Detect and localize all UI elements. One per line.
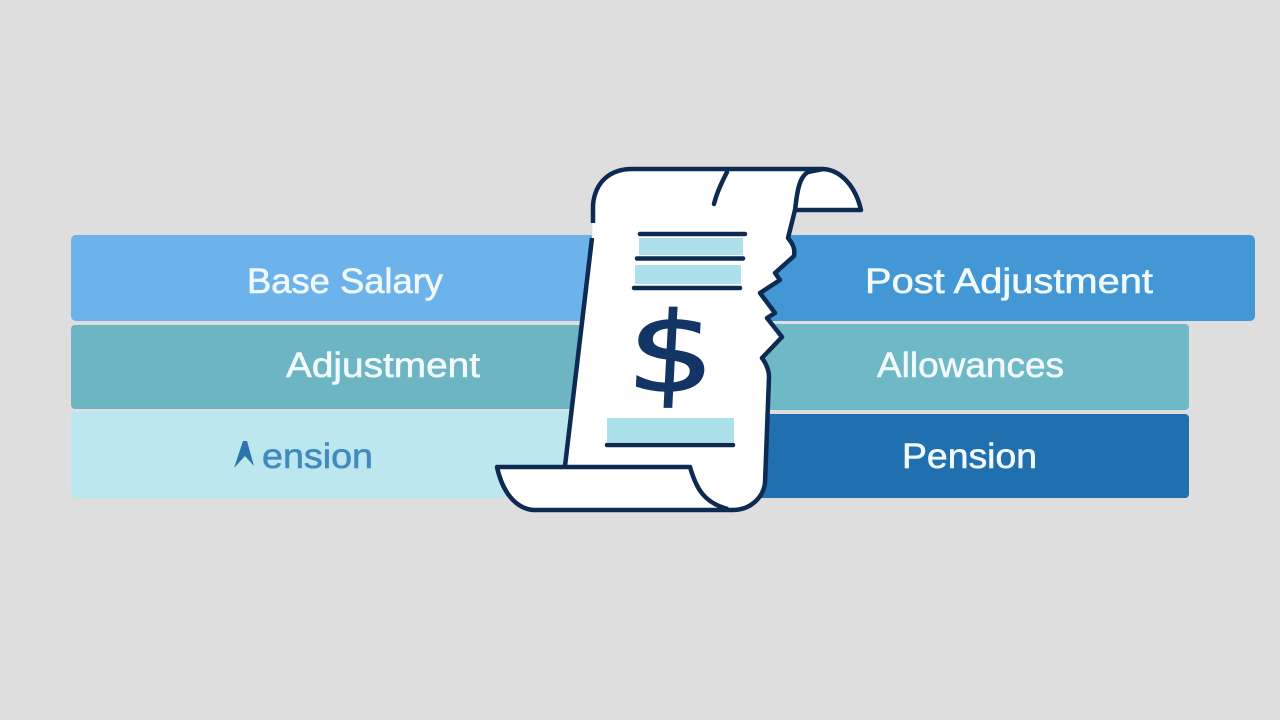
bar: Adjustment: [71, 325, 631, 409]
total row: [607, 418, 734, 445]
bar: Post Adjustment: [740, 235, 1255, 321]
scroll outline: [497, 169, 823, 510]
bar: Base Salary: Base Salary: [247, 262, 444, 301]
bar: Base Salary: [71, 235, 631, 321]
icon: distorted first letter: [234, 441, 254, 468]
icon: payslip scroll: [497, 169, 861, 510]
bar: Post Adjustment: Post Adjustment: [865, 262, 1153, 301]
top curl: [795, 169, 861, 210]
bar: Allowances: [740, 324, 1189, 410]
bar: Adjustment: Adjustment: [286, 346, 480, 385]
bar: Pension (left): [71, 411, 631, 498]
scroll body: [497, 169, 823, 510]
left column: pay components: [71, 235, 631, 498]
bar: Pension (left): ension: [262, 437, 373, 476]
line items: [634, 234, 745, 288]
bar: Allowances: Allowances: [877, 346, 1064, 385]
right column: pay components: [740, 235, 1255, 498]
bar: Pension (right): [740, 414, 1189, 498]
bar: Pension (right): Pension: [902, 437, 1037, 476]
fold mark: [714, 172, 727, 204]
dollar sign: $: [624, 289, 719, 417]
